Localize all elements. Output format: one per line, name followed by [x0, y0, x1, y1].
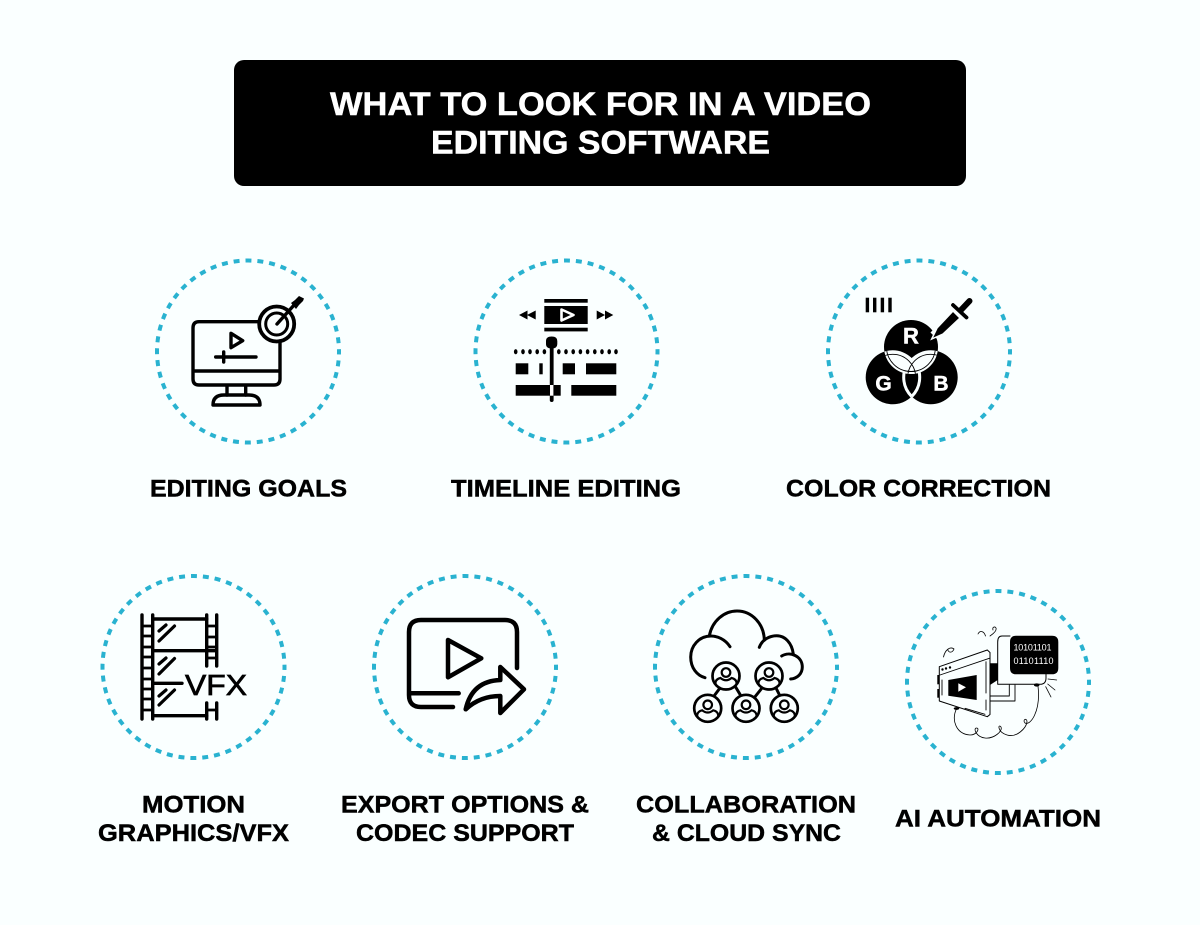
- icon: RGB circles with dropper: [866, 298, 970, 404]
- panel: motion graphics: [102, 576, 284, 758]
- icon: AI video and binary screen: [937, 627, 1058, 738]
- icon: film strip with VFX: [142, 615, 247, 719]
- panel: timeline editing: [476, 260, 658, 442]
- icon: film strip with VFX: VFX: [185, 670, 247, 702]
- label: motion graphics: GRAPHICS/VFX: [98, 820, 290, 847]
- label: editing goals: EDITING GOALS: [150, 476, 347, 502]
- label: motion graphics: MOTION: [142, 792, 245, 818]
- panel: color correction: [828, 260, 1010, 442]
- panel: AI automation: [907, 591, 1089, 773]
- title: WHAT TO LOOK FOR IN A VIDEO: [330, 86, 871, 122]
- icon: monitor with target: [193, 296, 304, 405]
- label: export options: [341, 792, 589, 847]
- icon: AI video and binary screen: 10101101: [1014, 642, 1052, 652]
- icon: RGB circles with dropper: B: [933, 373, 949, 396]
- label: export options: EXPORT OPTIONS &: [341, 792, 589, 818]
- panel: editing goals: [157, 260, 339, 442]
- title: [234, 60, 966, 186]
- label: collaboration: COLLABORATION: [636, 792, 856, 818]
- panel: export options: [374, 576, 556, 758]
- icon: AI video and binary screen: 01101110: [1014, 656, 1054, 666]
- icon: RGB circles with dropper: G: [875, 373, 892, 396]
- label: collaboration: [636, 792, 856, 847]
- icon: RGB circles with dropper: R: [903, 324, 919, 348]
- label: export options: CODEC SUPPORT: [356, 820, 574, 847]
- icon: timeline: [514, 299, 618, 402]
- label: motion graphics: [98, 792, 290, 847]
- icon: video export arrow: [409, 620, 524, 713]
- label: timeline editing: TIMELINE EDITING: [451, 476, 681, 502]
- panel: collaboration: [655, 576, 837, 758]
- title: EDITING SOFTWARE: [431, 124, 770, 160]
- label: color correction: COLOR CORRECTION: [786, 476, 1051, 502]
- label: AI automation: AI AUTOMATION: [895, 806, 1101, 832]
- icon: cloud with people: [691, 611, 802, 722]
- label: collaboration: & CLOUD SYNC: [652, 820, 841, 847]
